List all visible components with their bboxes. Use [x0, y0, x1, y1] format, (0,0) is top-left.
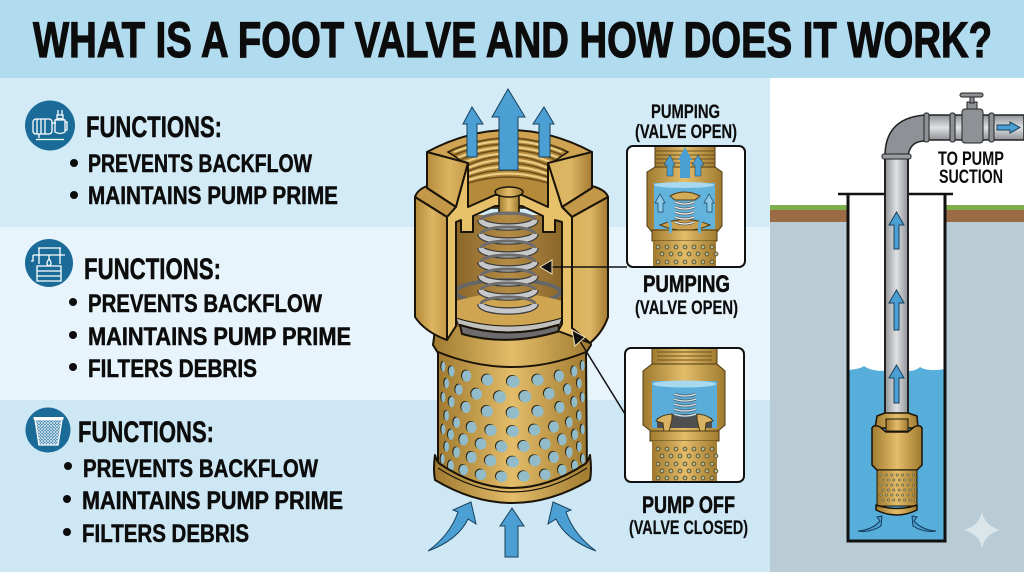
spring mini — [675, 202, 694, 224]
list item: PREVENTS BACKFLOW — [83, 455, 318, 483]
body — [643, 364, 725, 432]
inset: valve open — [627, 146, 745, 268]
horizontal pipe — [925, 115, 1024, 140]
label: pumping bottom — [635, 271, 738, 319]
list item: FILTERS DEBRIS — [82, 520, 249, 548]
bottom cap — [876, 505, 917, 515]
suction pipe — [882, 93, 1024, 416]
internal cavity — [456, 215, 562, 327]
arrows: flow into strainer — [428, 502, 596, 557]
arrows: flow out of valve — [463, 89, 554, 170]
arrows: flow through valve — [678, 147, 692, 178]
elbow flange — [882, 154, 911, 159]
rear gasket — [456, 280, 560, 304]
heading: FUNCTIONS: — [84, 253, 221, 286]
hex nut — [875, 413, 918, 428]
list item: PREVENTS BACKFLOW — [88, 290, 322, 318]
spring — [481, 213, 535, 311]
callout arrow: spring to open view — [540, 260, 627, 274]
closed seat — [657, 414, 712, 428]
well shaft — [838, 194, 953, 541]
list item: MAINTAINS PUMP PRIME — [88, 323, 351, 351]
list item: PREVENTS BACKFLOW — [88, 150, 312, 178]
bottom ring — [434, 455, 591, 503]
inset: valve closed — [625, 347, 744, 483]
gasket — [460, 325, 560, 340]
header band — [0, 0, 1024, 78]
icon: well — [25, 239, 73, 287]
spring mini — [674, 394, 696, 416]
threaded opening — [448, 138, 568, 208]
body left face — [415, 197, 447, 340]
main foot valve cutaway — [415, 130, 608, 503]
hex nut right face — [548, 152, 592, 207]
strainer body with holes — [438, 352, 587, 498]
ground: soil — [770, 210, 1024, 222]
list item: MAINTAINS PUMP PRIME — [88, 182, 338, 210]
label: pumping top: PUMPING — [651, 102, 720, 123]
icon: strainer basket — [26, 408, 70, 452]
valve seat disc — [456, 293, 562, 326]
icon: sparkle — [964, 512, 1000, 548]
ground: rock — [770, 222, 1024, 572]
list item: MAINTAINS PUMP PRIME — [82, 487, 343, 515]
list item: FILTERS DEBRIS — [88, 355, 257, 383]
label: to pump suction: TO PUMP — [938, 149, 1004, 170]
gate valve — [960, 93, 983, 143]
label: pump off: (VALVE CLOSED) — [629, 518, 748, 539]
water — [848, 366, 945, 541]
label: pumping top — [635, 102, 737, 143]
water chamber — [654, 183, 715, 229]
arrow: flow to pump — [997, 122, 1020, 133]
elbow — [885, 115, 925, 156]
label: pumping bottom: PUMPING — [643, 271, 730, 298]
body — [872, 426, 922, 470]
label: pumping top: (VALVE OPEN) — [635, 122, 737, 143]
valve stem and cap — [495, 187, 523, 214]
label: pump off: PUMP OFF — [642, 492, 735, 519]
arrows in pipe — [889, 212, 904, 403]
heading: FUNCTIONS: — [78, 416, 214, 449]
hex nut left face — [427, 152, 468, 207]
panel background: bottom row — [0, 400, 770, 572]
callout arrow: seat to closed view — [572, 330, 625, 414]
panel background: top row — [0, 78, 770, 227]
panel: functions 2 — [25, 239, 351, 383]
label: to pump suction — [938, 149, 1004, 188]
threaded neck — [654, 147, 716, 167]
installed foot valve — [872, 413, 922, 515]
collar — [433, 322, 591, 368]
label: pumping bottom: (VALVE OPEN) — [635, 298, 738, 319]
heading: FUNCTIONS: — [86, 111, 222, 144]
arrows: inflow at well bottom — [858, 516, 936, 531]
body — [647, 167, 722, 232]
panel: functions 1 — [25, 100, 338, 210]
body left shoulder — [415, 186, 456, 217]
panel: functions 3 — [26, 408, 343, 548]
threaded neck — [652, 349, 718, 364]
icon: pump — [25, 100, 75, 150]
label: pump off — [629, 492, 748, 539]
water chamber — [652, 381, 717, 428]
hex nut top surface — [427, 130, 592, 165]
collar and mini strainer — [652, 230, 717, 241]
disc and stem — [670, 192, 700, 200]
panel background: middle row — [0, 227, 770, 400]
collar and mini strainer — [650, 431, 719, 441]
body right shoulder — [562, 186, 608, 217]
label: to pump suction: SUCTION — [939, 167, 1003, 188]
ground: grass — [770, 205, 1024, 210]
section wall — [447, 163, 590, 343]
strainer — [877, 470, 917, 506]
pipe flanges — [924, 113, 994, 142]
body right face — [572, 197, 608, 343]
installation panel background — [770, 78, 1024, 572]
